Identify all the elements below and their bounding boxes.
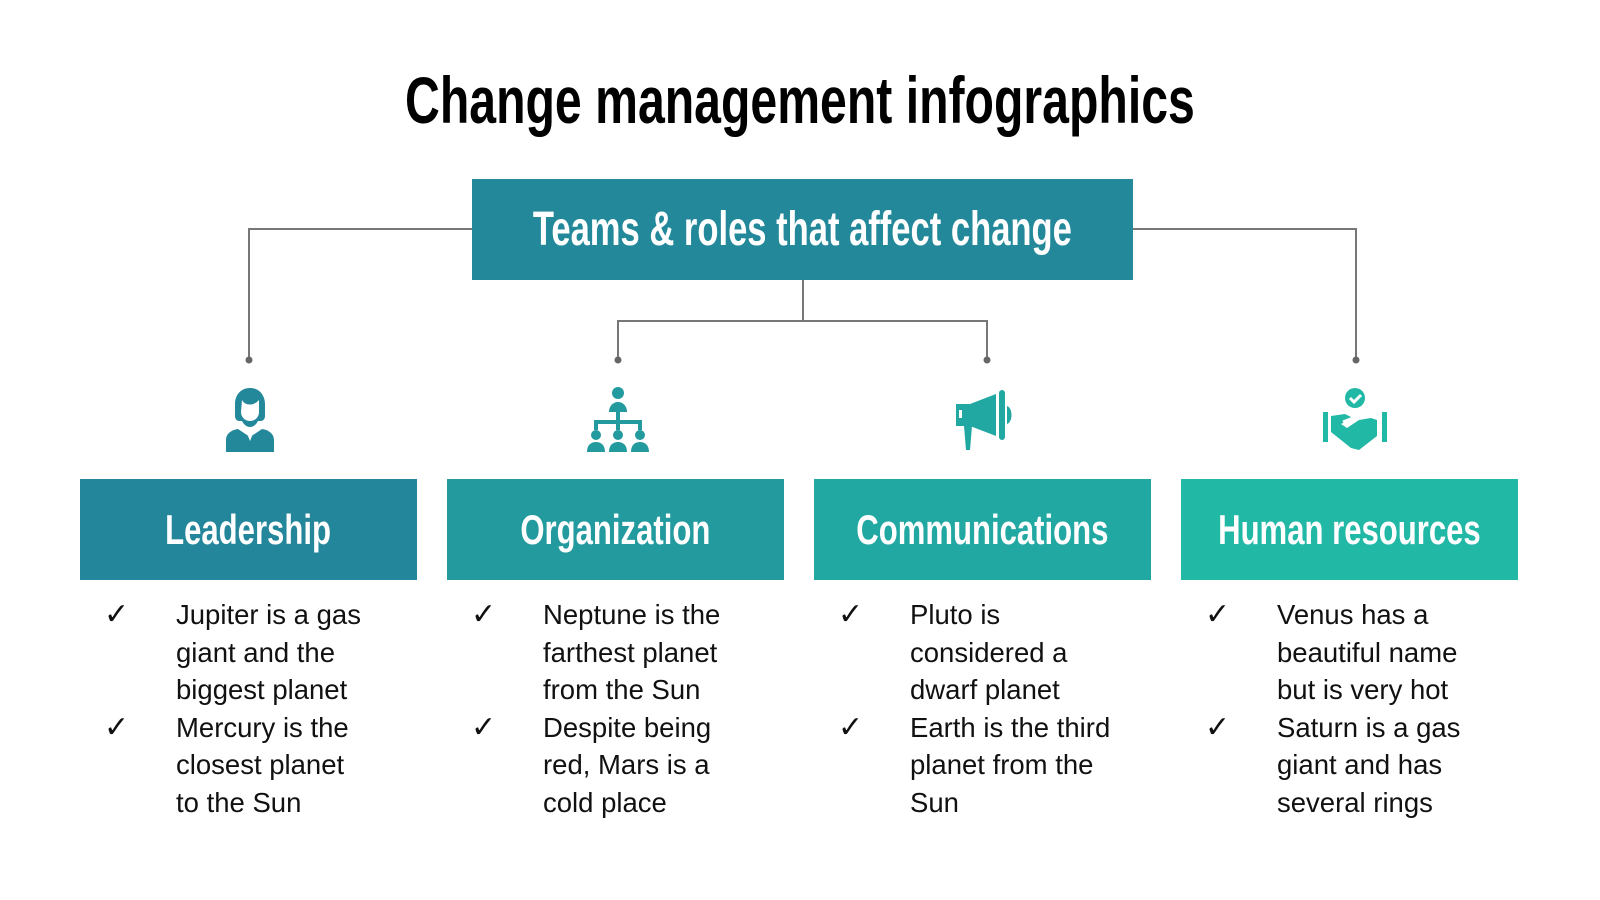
list: leadership: giant and the — [176, 636, 335, 668]
list: communications: ✓ — [838, 710, 863, 744]
list: human resources — [1205, 598, 1460, 818]
list: leadership: closest planet — [176, 749, 344, 780]
header box: Teams & roles that affect change — [533, 203, 1072, 256]
list: organization: Despite being — [543, 712, 711, 742]
list: human resources: giant and has — [1277, 749, 1442, 780]
icon: leader — [226, 388, 274, 452]
icon: handshake — [1323, 388, 1387, 450]
card: Communications: Communications — [856, 506, 1109, 552]
card: Organization: Organization — [521, 506, 710, 552]
list: human resources: Saturn is a gas — [1277, 712, 1460, 742]
list: organization: from the Sun — [543, 674, 700, 705]
list: communications: Pluto is — [910, 599, 1000, 630]
list: organization: red, Mars is a — [543, 749, 710, 780]
card: Human resources — [1181, 479, 1518, 580]
card: Human resources: Human resources — [1218, 506, 1481, 552]
list: organization: cold place — [543, 786, 667, 818]
list: leadership: biggest planet — [176, 674, 347, 705]
list: human resources: ✓ — [1205, 598, 1230, 631]
list: human resources: ✓ — [1205, 710, 1230, 744]
list: leadership: ✓ — [104, 598, 129, 631]
list: leadership: Jupiter is a gas — [176, 599, 361, 630]
list: communications: Sun — [910, 786, 959, 818]
list: leadership — [104, 598, 361, 818]
list: organization: Neptune is the — [543, 599, 720, 630]
icon: organization — [587, 387, 649, 452]
list: human resources: several rings — [1277, 786, 1433, 818]
card: Communications — [814, 479, 1151, 580]
list: communications: considered a — [910, 636, 1067, 668]
list: leadership: to the Sun — [176, 786, 301, 818]
list: leadership: ✓ — [104, 710, 129, 744]
list: communications: dwarf planet — [910, 674, 1060, 705]
card: Organization — [447, 479, 784, 580]
header box — [472, 179, 1133, 280]
list: communications: ✓ — [838, 598, 863, 631]
title: Change management infographics — [405, 63, 1195, 137]
list: organization — [471, 598, 720, 818]
list: organization: ✓ — [471, 710, 496, 744]
list: human resources: but is very hot — [1277, 674, 1448, 705]
card: Leadership — [80, 479, 417, 580]
card: Leadership: Leadership — [166, 506, 331, 552]
list: human resources: Venus has a — [1277, 599, 1428, 630]
list: organization: farthest planet — [543, 636, 717, 668]
list: communications — [838, 598, 1110, 818]
list: organization: ✓ — [471, 598, 496, 631]
list: leadership: Mercury is the — [176, 712, 349, 742]
icon: megaphone — [956, 390, 1012, 450]
list: communications: planet from the — [910, 749, 1093, 780]
list: human resources: beautiful name — [1277, 636, 1457, 668]
list: communications: Earth is the third — [910, 712, 1110, 742]
